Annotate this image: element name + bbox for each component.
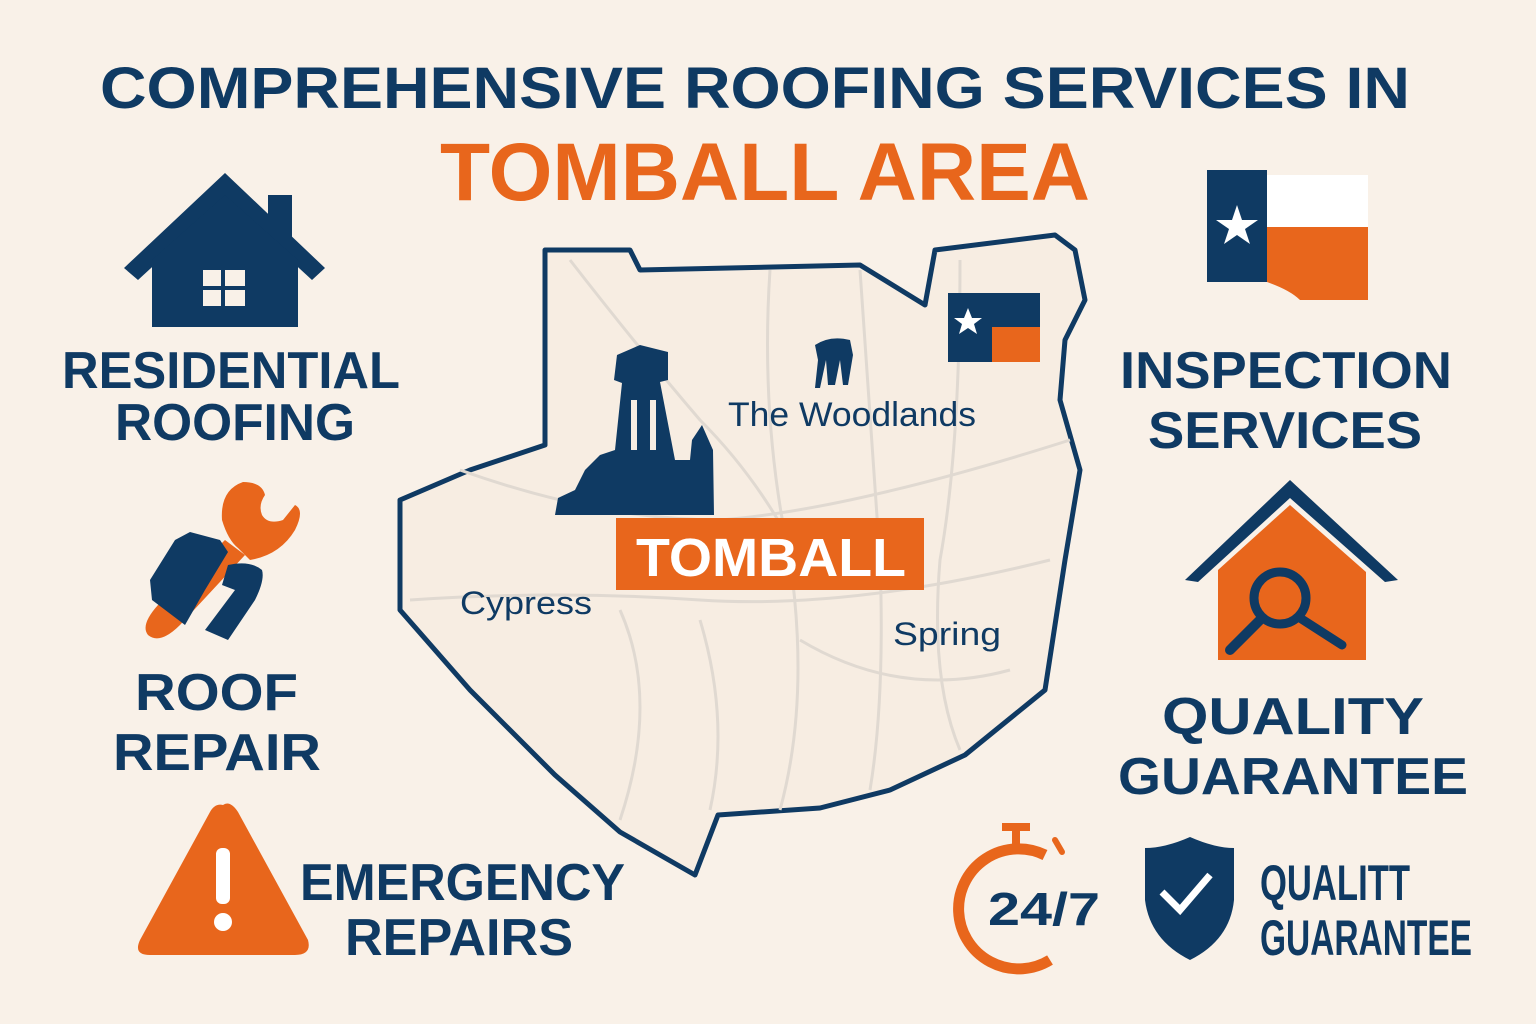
text: residential roofing: RESIDENTIAL [62,342,400,400]
title [100,56,1410,218]
text: emergency repairs: REPAIRS [345,909,573,967]
icon: water tower skyline [555,345,714,515]
label: Spring: Spring [893,616,1001,652]
text: emergency repairs: EMERGENCY [300,854,625,912]
text: roof repair: REPAIR [113,724,321,782]
label: Cypress: Cypress [460,585,592,621]
icon: house [124,173,325,327]
text: inspection services: SERVICES [1148,402,1422,460]
map [400,235,1085,875]
text: roof repair [113,664,321,782]
text: residential roofing: ROOFING [115,394,355,452]
icon: small texas flag [948,293,1040,362]
text: qualitt guarantee: QUALITT [1260,855,1410,911]
icon: 24/7 stopwatch [959,823,1100,969]
text: emergency repairs [300,854,625,967]
icon: texas flag [1207,170,1368,300]
text: residential roofing [62,342,400,452]
text: roof repair: ROOF [135,664,298,722]
icon: warning triangle [138,804,309,955]
title: COMPREHENSIVE ROOFING SERVICES IN [100,56,1410,121]
label: The Woodlands: The Woodlands [728,396,976,434]
icon: house with magnifier [1185,480,1398,660]
text: inspection services: INSPECTION [1120,342,1452,400]
text: qualitt guarantee [1260,855,1472,966]
title: TOMBALL AREA [440,127,1090,218]
text: quality guarantee: QUALITY [1162,688,1424,746]
icon: small water tower [815,338,853,388]
icon: wrench and roller [146,482,300,640]
text: quality guarantee: GUARANTEE [1118,748,1468,806]
icon: shield check [1145,837,1234,960]
text: quality guarantee [1118,688,1468,806]
icon: 24/7 stopwatch: 24/7 [988,883,1100,935]
text: inspection services [1120,342,1452,460]
label: TOMBALL: TOMBALL [636,528,906,588]
